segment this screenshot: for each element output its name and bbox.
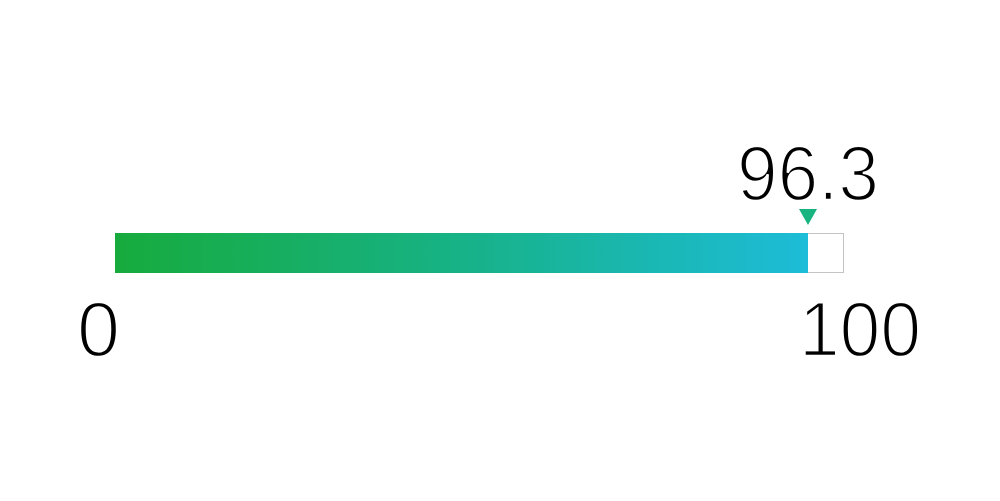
scale maximum label: 100 <box>799 285 921 373</box>
bar fill <box>115 233 808 273</box>
scale minimum label: 0 <box>77 285 120 373</box>
marker triangle <box>799 209 817 225</box>
value label: 96.3 <box>737 129 879 217</box>
progress bar <box>115 233 844 273</box>
bar track <box>116 234 844 272</box>
